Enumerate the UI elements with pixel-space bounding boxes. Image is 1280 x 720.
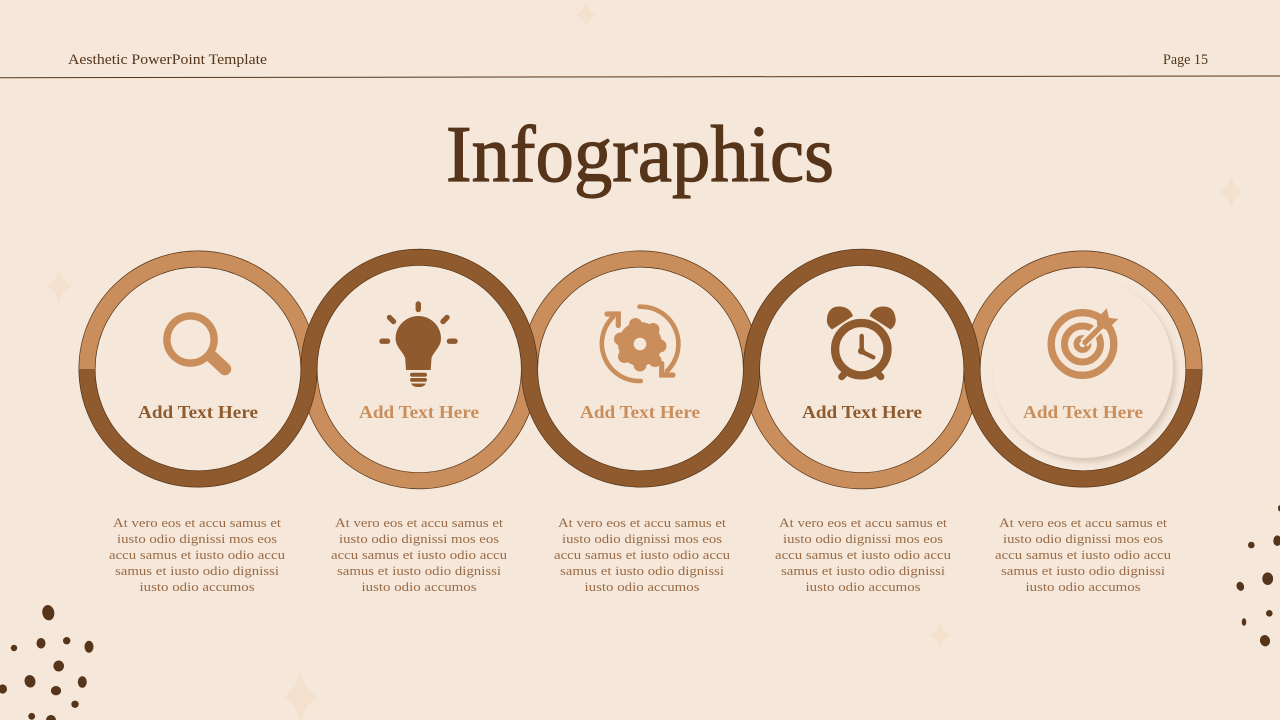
text block 5: samus et iusto odio dignissi [1001, 564, 1166, 578]
icon: gear with rotating arrows [602, 307, 678, 381]
icon: alarm clock [827, 306, 896, 377]
text block 3: iusto odio accumos [584, 580, 700, 594]
icon: target with arrow [1051, 308, 1118, 375]
text block 2: iusto odio accumos [362, 580, 477, 594]
header text: template name: Aesthetic PowerPoint Template [68, 52, 267, 68]
text block 4: accu samus et iusto odio accu [775, 548, 952, 562]
text block 1: iusto odio dignissi mos eos [117, 532, 277, 546]
text block 4: iusto odio dignissi mos eos [783, 532, 943, 546]
text block 3 [554, 516, 731, 594]
text block 2: iusto odio dignissi mos eos [339, 532, 499, 546]
text block 2 [331, 516, 508, 594]
text block 4: iusto odio accumos [806, 580, 921, 594]
icon: light bulb [382, 304, 455, 387]
dark wave ring [87, 257, 1194, 479]
text block 3: At vero eos et accu samus et [558, 516, 726, 530]
title: Infographics [446, 111, 834, 199]
text block 1: At vero eos et accu samus et [113, 516, 281, 530]
inner shadow disc of circle 5 [993, 278, 1173, 458]
text block 5 [995, 516, 1172, 594]
text block 2: accu samus et iusto odio accu [331, 548, 508, 562]
text block 4: At vero eos et accu samus et [779, 516, 947, 530]
heading 3: Add Text Here [580, 402, 700, 422]
text block 1 [109, 516, 286, 594]
heading 4: Add Text Here [802, 402, 922, 422]
light wave ring [87, 259, 1194, 481]
text block 3: iusto odio dignissi mos eos [562, 532, 722, 546]
text block 3: samus et iusto odio dignissi [560, 564, 725, 578]
decorative dots: bottom left [0, 604, 93, 720]
icon: magnifier [167, 316, 225, 369]
text block 5: iusto odio dignissi mos eos [1003, 532, 1163, 546]
text block 3: accu samus et iusto odio accu [554, 548, 731, 562]
interlocking rings [87, 257, 1194, 481]
text block 2: samus et iusto odio dignissi [337, 564, 502, 578]
text block 5: accu samus et iusto odio accu [995, 548, 1172, 562]
text block 5: At vero eos et accu samus et [999, 516, 1167, 530]
text block 2: At vero eos et accu samus et [335, 516, 503, 530]
heading 1: Add Text Here [138, 402, 258, 422]
text block 4 [775, 516, 952, 594]
text block 1: accu samus et iusto odio accu [109, 548, 286, 562]
heading 5: Add Text Here [1023, 402, 1143, 422]
heading 2: Add Text Here [359, 402, 479, 422]
header text: page number: Page 15 [1163, 52, 1208, 68]
text block 1: iusto odio accumos [140, 580, 255, 594]
text block 4: samus et iusto odio dignissi [781, 564, 946, 578]
text block 5: iusto odio accumos [1026, 580, 1141, 594]
decorative dots: bottom right [1235, 505, 1280, 647]
text block 1: samus et iusto odio dignissi [115, 564, 280, 578]
